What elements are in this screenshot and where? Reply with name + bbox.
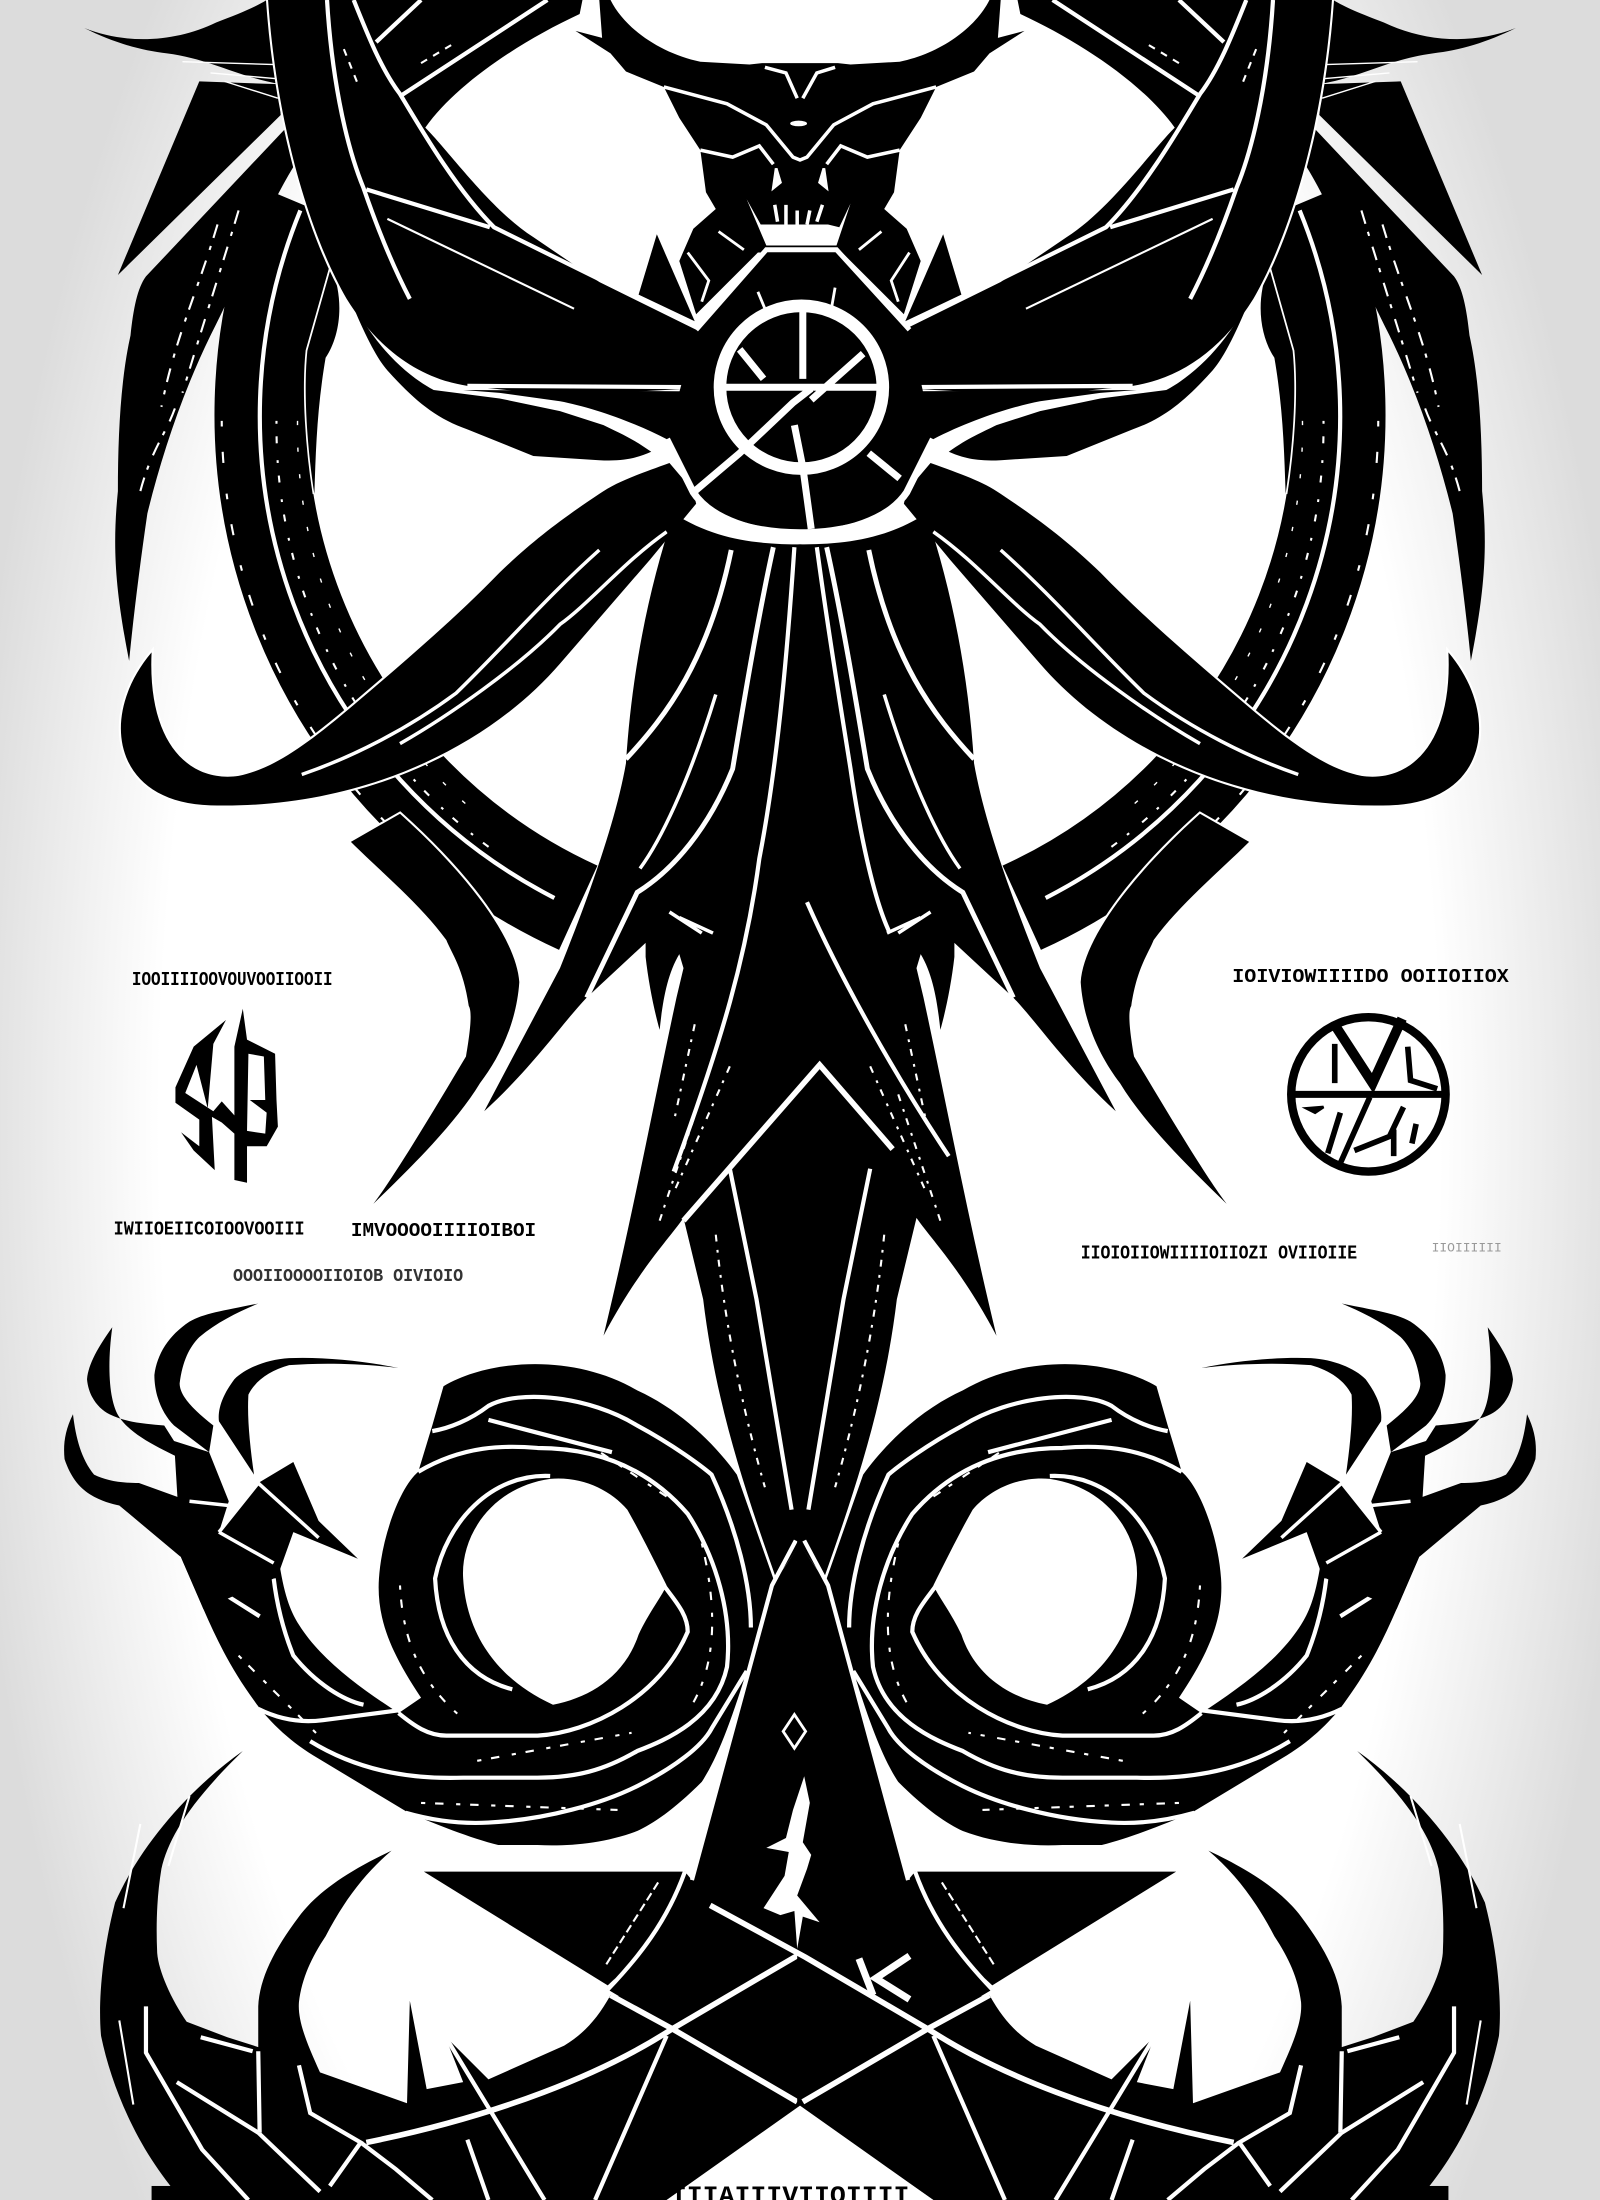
left symbol <box>175 1009 278 1183</box>
K glyph <box>859 1956 909 1999</box>
left caption three: OOOIIOOOOIIOIOB OIVIOIO <box>233 1267 463 1287</box>
central rune <box>764 1776 820 1949</box>
left half of emblem <box>64 0 890 2200</box>
central wheel <box>667 250 933 534</box>
right caption: IIOIOIIOWIIIIOIIOZI OVIIOIIE <box>1081 1243 1357 1265</box>
skull and top horns <box>575 0 1025 314</box>
chevron in the robe <box>684 1065 893 1221</box>
left caption two: IMVOOOOIIIIOIBOI <box>351 1220 536 1242</box>
faint right note: IIOIIIIII <box>1432 1241 1502 1256</box>
small diamond <box>783 1715 806 1748</box>
central robe lines <box>674 547 949 1172</box>
right symbol <box>1291 1017 1446 1172</box>
right half of emblem <box>710 0 1536 2200</box>
left caption one: IWIIOEIICOIOOVOOIII <box>114 1219 305 1241</box>
right heading text: IOIVIOWIIIIDO OOIIOIIOX <box>1232 966 1509 988</box>
bottom white apex <box>667 2107 933 2200</box>
left heading text: IOOIIIIOOVOUVOOIIOOII <box>132 969 333 991</box>
